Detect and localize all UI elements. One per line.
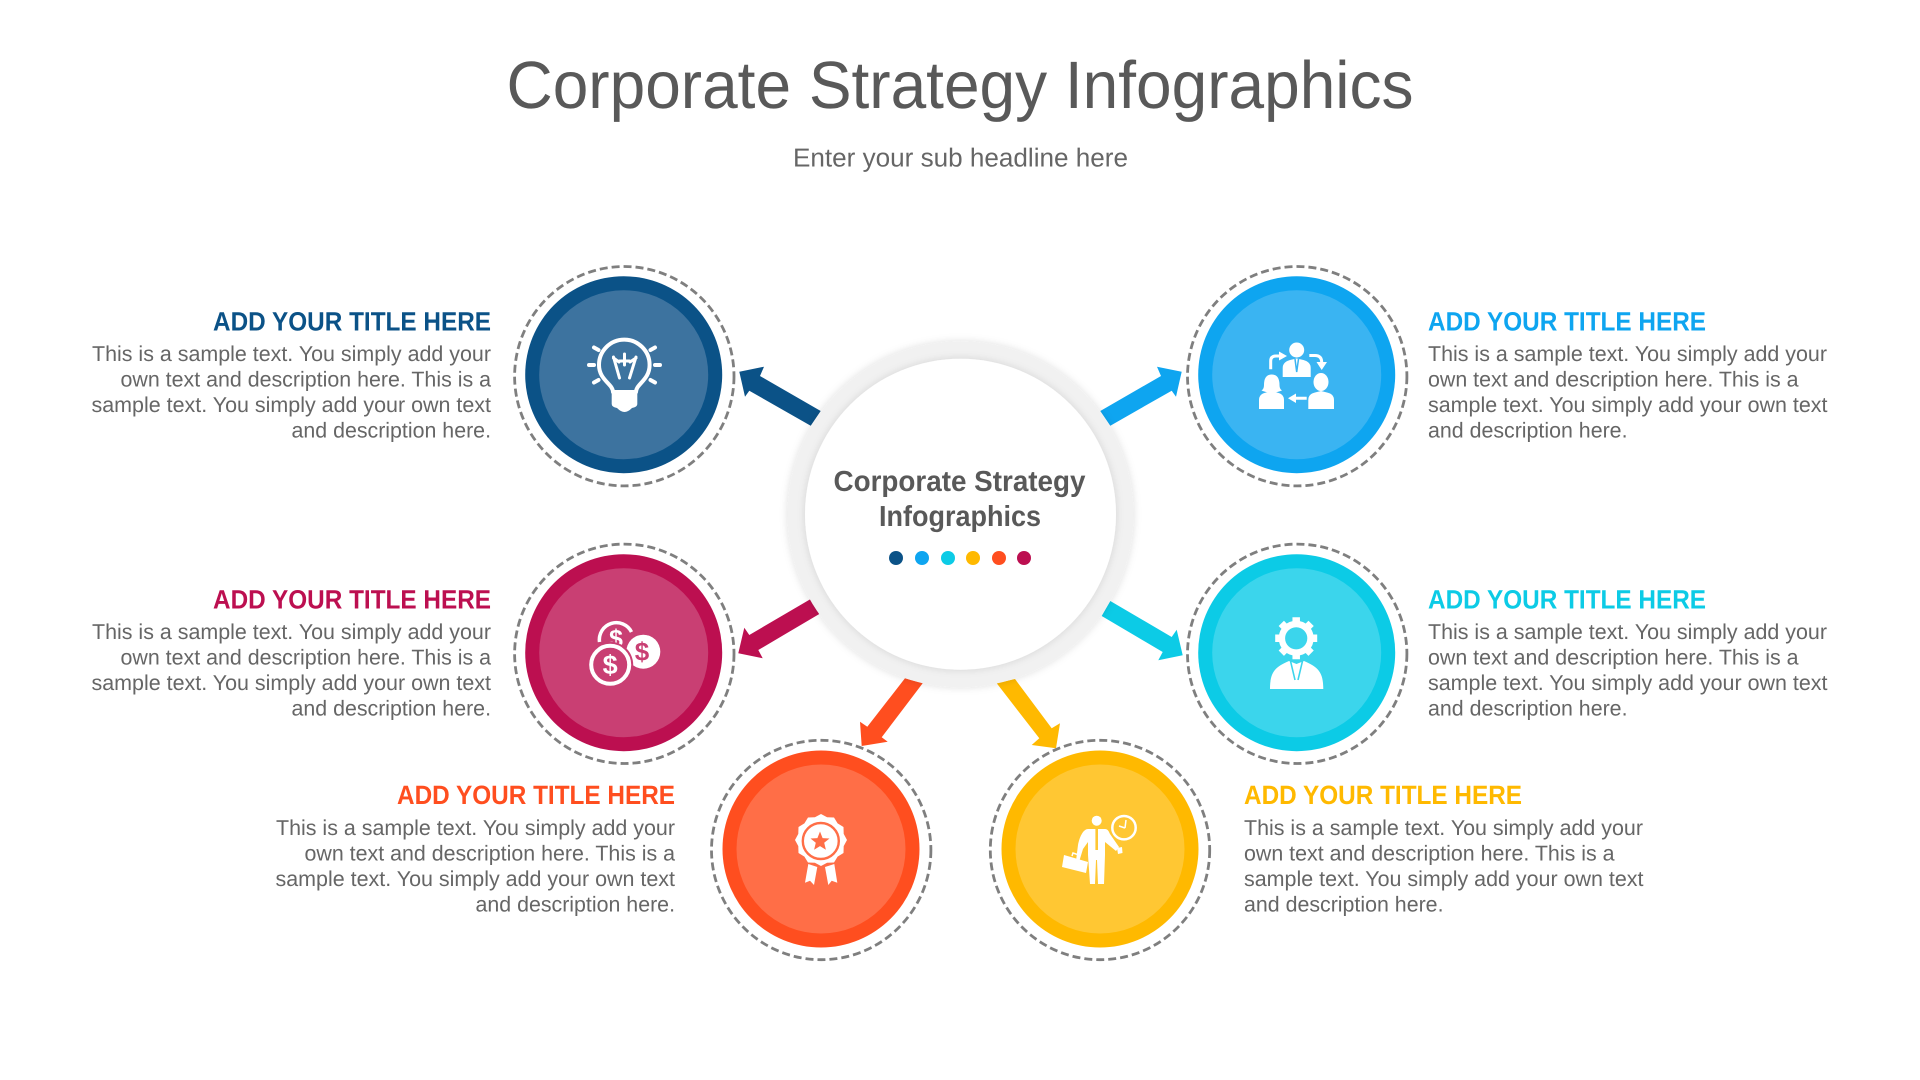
description: sample text. You simply add your own text xyxy=(92,393,491,417)
icon: coins: $ xyxy=(609,625,623,653)
description xyxy=(1244,816,1644,916)
hub colour dots xyxy=(889,551,1031,565)
icon: award badge xyxy=(795,814,847,885)
panel: orange node xyxy=(712,740,931,960)
heading: ADD YOUR TITLE HERE xyxy=(397,780,675,810)
title: Corporate Strategy Infographics xyxy=(506,48,1414,123)
description xyxy=(92,342,491,443)
hub heading: Infographics xyxy=(879,501,1041,533)
panel: cyan node xyxy=(1188,544,1407,764)
description xyxy=(1428,342,1828,443)
hub heading xyxy=(834,466,1086,533)
heading: ADD YOUR TITLE HERE xyxy=(1428,585,1706,615)
icon: gear head businessman xyxy=(1270,617,1323,689)
description: own text and description here. This is a xyxy=(1428,368,1799,392)
heading: ADD YOUR TITLE HERE xyxy=(1244,780,1522,810)
text: orange node xyxy=(276,780,675,916)
description: sample text. You simply add your own text xyxy=(1428,393,1828,417)
description xyxy=(92,620,491,721)
description xyxy=(1428,620,1828,721)
description: own text and description here. This is a xyxy=(1428,646,1799,670)
icon: coins xyxy=(587,623,660,688)
heading: ADD YOUR TITLE HERE xyxy=(1428,307,1706,337)
description: and description here. xyxy=(292,419,491,443)
description: and description here. xyxy=(1428,697,1628,721)
description: and description here. xyxy=(292,697,491,721)
description: and description here. xyxy=(1244,892,1444,916)
icon: businessman with briefcase and clock xyxy=(1062,816,1136,884)
description: sample text. You simply add your own text xyxy=(1244,867,1644,891)
description: and description here. xyxy=(476,892,675,916)
description: own text and description here. This is a xyxy=(1244,842,1615,866)
description: and description here. xyxy=(1428,419,1628,443)
text: yellow node xyxy=(1244,780,1644,916)
arrow: yellow xyxy=(997,679,1060,748)
arrow: blue xyxy=(1100,367,1182,426)
heading: ADD YOUR TITLE HERE xyxy=(213,307,491,337)
description: sample text. You simply add your own text xyxy=(1428,671,1828,695)
description: own text and description here. This is a xyxy=(120,368,491,392)
icon: light bulb xyxy=(589,340,660,412)
arrow: dark blue xyxy=(739,367,821,426)
description: This is a sample text. You simply add your xyxy=(92,620,491,644)
description xyxy=(276,816,675,916)
panel: blue node xyxy=(1188,266,1407,486)
text: blue node xyxy=(1428,307,1828,443)
panel: crimson node xyxy=(515,544,734,764)
description: own text and description here. This is a xyxy=(304,842,675,866)
description: This is a sample text. You simply add your xyxy=(92,342,491,366)
centre hub xyxy=(788,341,1134,687)
icon: coins: $ xyxy=(603,650,618,680)
text: cyan node xyxy=(1428,585,1828,721)
description: This is a sample text. You simply add your xyxy=(276,816,675,840)
description: This is a sample text. You simply add your xyxy=(1244,816,1643,840)
subtitle: Enter your sub headline here xyxy=(793,142,1128,172)
arrow: cyan xyxy=(1102,601,1183,660)
description: This is a sample text. You simply add your xyxy=(1428,342,1827,366)
description: This is a sample text. You simply add your xyxy=(1428,620,1827,644)
hub heading: Corporate Strategy xyxy=(834,466,1086,498)
heading: ADD YOUR TITLE HERE xyxy=(213,585,491,615)
icon: coins: $ xyxy=(635,636,650,666)
text: dark blue node xyxy=(92,307,491,443)
panel: yellow node xyxy=(990,740,1210,960)
icon: team cycle xyxy=(1259,342,1334,409)
arrow: orange xyxy=(860,678,923,746)
description: own text and description here. This is a xyxy=(120,646,491,670)
arrow: crimson xyxy=(738,599,819,658)
description: sample text. You simply add your own text xyxy=(276,867,675,891)
description: sample text. You simply add your own text xyxy=(92,671,491,695)
text: crimson node xyxy=(92,585,491,721)
panel: dark blue node xyxy=(515,266,734,486)
